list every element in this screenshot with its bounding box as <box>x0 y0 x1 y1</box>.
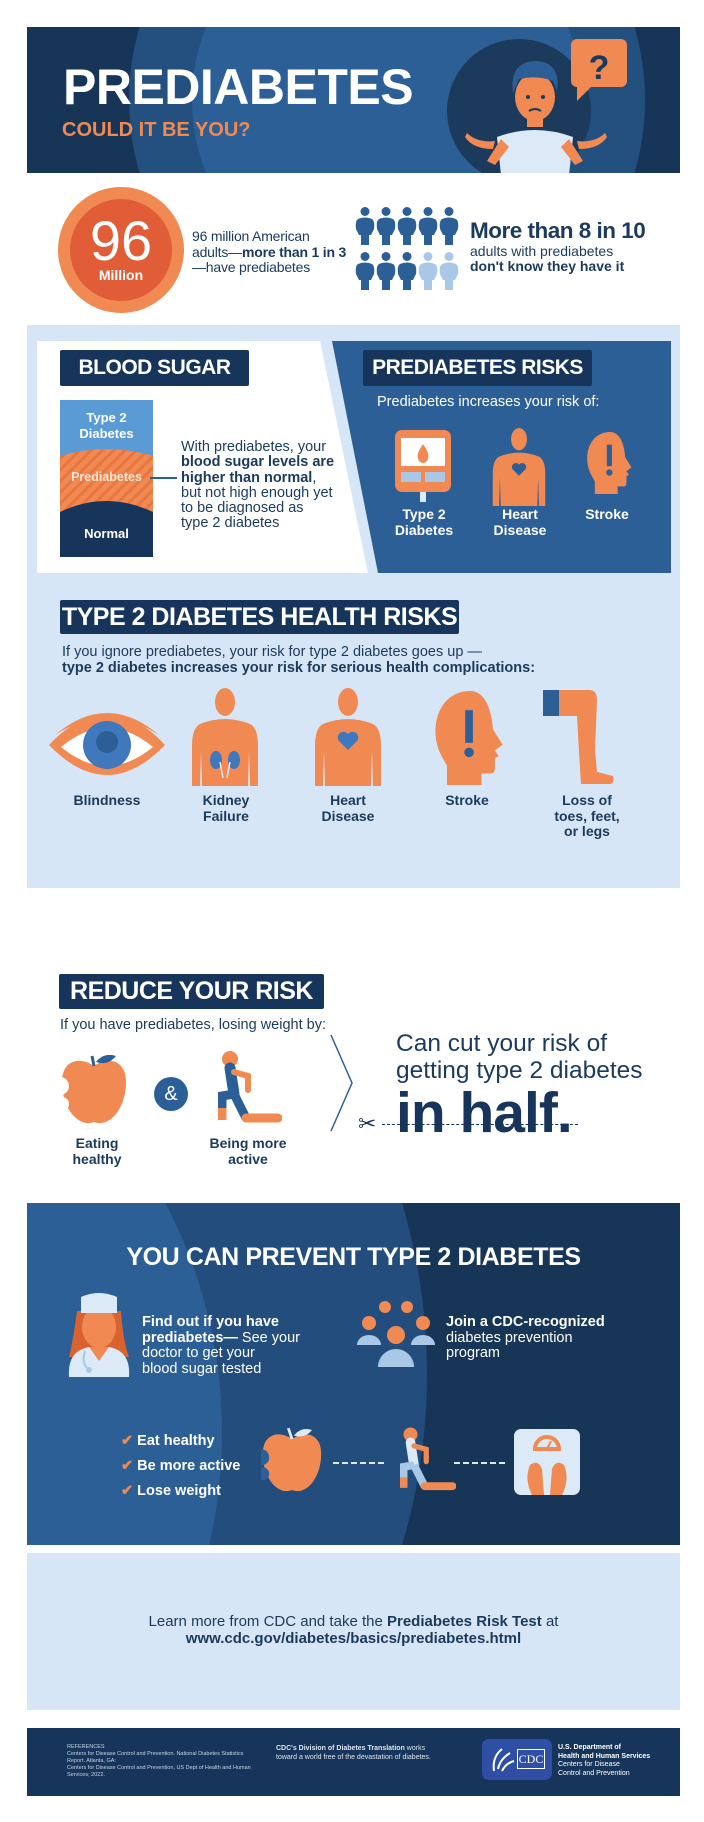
text: references: Centers for Disease Control and Prevention, US Dept of Health and Human Services; 2022. <box>67 1765 251 1778</box>
icon: apple <box>261 1428 322 1492</box>
text: blood sugar explanation: higher than normal, <box>181 470 316 486</box>
text: health risks intro: type 2 diabetes increases your risk for serious health complications: <box>62 660 535 676</box>
icon: eye <box>49 713 165 775</box>
label: stroke: Stroke <box>445 792 489 808</box>
stat text: 96 million: 96 million American <box>192 228 310 244</box>
stat text: 8 in 10: More than 8 in 10 <box>470 218 645 243</box>
text: reduce intro: If you have prediabetes, losing weight by: <box>60 1017 326 1033</box>
text: blood sugar explanation: type 2 diabetes <box>181 515 279 531</box>
icon: stroke head <box>587 432 632 494</box>
label: heart disease: Heart <box>502 506 538 522</box>
icon: doctor <box>68 1293 130 1377</box>
stat text: 8 in 10: adults with prediabetes <box>470 243 613 259</box>
heading: prediabetes risks: PREDIABETES RISKS <box>372 356 583 379</box>
text: can cut your risk <box>396 1030 643 1084</box>
label: blindness: Blindness <box>74 792 140 808</box>
text: references: REFERENCES <box>67 1744 105 1750</box>
logo: cdc: CDC <box>519 1752 543 1766</box>
title: PREDIABETES <box>63 59 413 115</box>
text: hhs: U.S. Department of <box>558 1744 621 1751</box>
chart: blood sugar bar: Prediabetes <box>71 470 142 484</box>
text: find out: blood sugar tested <box>142 1360 261 1376</box>
label: heart disease <box>322 792 374 824</box>
callout: in half: ✂ <box>358 1111 376 1136</box>
chart: blood sugar bar <box>60 400 153 557</box>
label: eating healthy <box>72 1135 122 1167</box>
text: join program: Join a CDC-recognized <box>446 1314 605 1330</box>
label: eating healthy: Eating <box>76 1135 118 1151</box>
label: eating healthy: healthy <box>72 1151 122 1167</box>
connector line <box>150 477 177 479</box>
text: division: toward a world free of the devastation of diabetes. <box>276 1754 431 1761</box>
chart: blood sugar bar: Normal <box>84 526 129 541</box>
panel: learn more: www.cdc.gov/diabetes/basics/prediabetes.html <box>186 1630 521 1647</box>
heading: you can prevent: YOU CAN PREVENT TYPE 2 DIABETES <box>126 1243 581 1271</box>
text: blood sugar explanation <box>181 439 334 531</box>
label: being more active: active <box>228 1151 268 1167</box>
icon: kidney torso <box>192 688 258 786</box>
text: find out: Find out if you have <box>142 1314 279 1330</box>
label: heart disease: Heart <box>330 792 366 808</box>
panel: you can prevent <box>27 1203 680 1545</box>
text: find out: doctor to get your <box>142 1345 255 1361</box>
text: blood sugar explanation: to be diagnosed as <box>181 500 304 516</box>
stat: 96 million circle <box>58 187 184 313</box>
icon: leg <box>543 690 614 784</box>
connector dashes <box>333 1462 384 1464</box>
chart: blood sugar bar: Type 2 <box>86 410 127 425</box>
text: references: Centers for Disease Control and Prevention. National Diabetes Statistics Report. Atlanta, GA: <box>67 1751 243 1764</box>
label: loss of toes: toes, feet, <box>554 808 620 824</box>
text: hhs: Health and Human Services <box>558 1752 650 1760</box>
text: join program: program <box>446 1345 500 1361</box>
label: type 2 diabetes: Type 2 <box>402 506 446 522</box>
text: can cut your risk: Can cut your risk of <box>396 1030 607 1057</box>
label: type 2 diabetes: Diabetes <box>395 522 453 538</box>
icon: scale <box>514 1429 580 1495</box>
label: loss of toes <box>554 792 620 839</box>
heading: reduce your risk: REDUCE YOUR RISK <box>70 977 313 1005</box>
label: type 2 diabetes <box>395 506 453 538</box>
text: join program: diabetes prevention <box>446 1330 573 1346</box>
text: blood sugar explanation: blood sugar levels are <box>181 454 334 470</box>
callout: in half: in half. <box>396 1081 572 1145</box>
stat text: 8 in 10 <box>470 218 645 274</box>
heading: blood sugar: BLOOD SUGAR <box>78 356 230 379</box>
text: references <box>67 1744 251 1778</box>
connector dashes <box>454 1462 505 1464</box>
chart: blood sugar bar: Diabetes <box>79 426 134 441</box>
stat text: 96 million: adults—more than 1 in 3 <box>192 244 346 260</box>
icon: people 8 in 10 <box>356 207 458 290</box>
icon: ampersand: & <box>164 1083 178 1105</box>
text: find out <box>142 1314 300 1376</box>
subtitle: COULD IT BE YOU? <box>62 119 251 141</box>
icon: glucose meter <box>395 430 451 502</box>
label: kidney failure: Kidney <box>203 792 249 808</box>
heading: blood sugar <box>60 350 249 386</box>
icon: confused person: ? <box>589 49 609 87</box>
text: hhs <box>558 1744 650 1778</box>
panel: learn more <box>27 1553 680 1710</box>
panel: blood sugar (white) <box>37 341 671 573</box>
icon: runner <box>218 1051 282 1122</box>
icon: torso heart <box>492 428 546 506</box>
stat: 96 million circle: Million <box>99 267 143 283</box>
text: hhs: Control and Prevention <box>558 1770 630 1776</box>
list: checks: ✔ Eat healthy <box>121 1433 215 1449</box>
label: heart disease: Disease <box>494 522 546 538</box>
icon: apple <box>62 1054 126 1124</box>
label: being more active: Being more <box>209 1135 286 1151</box>
icon: group <box>357 1301 435 1367</box>
label: heart disease: Disease <box>322 808 374 824</box>
footer <box>27 1728 680 1796</box>
text: health risks intro <box>62 644 535 676</box>
text: can cut your risk: getting type 2 diabetes <box>396 1057 643 1084</box>
text: division <box>276 1744 431 1762</box>
list: checks <box>121 1433 240 1499</box>
icon: confused person <box>465 39 627 173</box>
logo: cdc <box>482 1739 552 1780</box>
header banner <box>27 27 680 173</box>
text: health risks intro: If you ignore prediabetes, your risk for type 2 diabetes goes up — <box>62 644 482 660</box>
text: risk intro: Prediabetes increases your risk of: <box>377 394 599 410</box>
stat text: 96 million <box>192 228 346 275</box>
panel: risks (light blue) <box>27 325 680 888</box>
label: heart disease <box>494 506 546 538</box>
heading: type 2 health risks: TYPE 2 DIABETES HEALTH RISKS <box>62 602 457 630</box>
text: hhs: Centers for Disease <box>558 1761 620 1768</box>
stat text: 96 million: —have prediabetes <box>192 259 310 275</box>
text: division: CDC's Division of Diabetes Translation works <box>276 1745 425 1752</box>
list: checks: ✔ Be more active <box>121 1458 240 1474</box>
arrow: chevron <box>330 1034 353 1132</box>
icon: stroke head <box>435 691 502 785</box>
icon: ampersand <box>154 1077 188 1111</box>
stat text: 8 in 10: don't know they have it <box>470 258 624 274</box>
text: join program <box>446 1314 605 1361</box>
heading: prediabetes risks <box>363 350 592 386</box>
label: kidney failure: Failure <box>203 808 249 824</box>
text: blood sugar explanation: With prediabetes, your <box>181 439 326 455</box>
stat: 96 million circle: 96 <box>90 209 152 272</box>
icon: runner <box>400 1428 456 1490</box>
label: kidney failure <box>203 792 250 824</box>
icon: heart torso <box>315 688 381 786</box>
panel: learn more: Learn more from CDC and take the Prediabetes Risk Test at <box>149 1613 558 1630</box>
label: loss of toes: Loss of <box>562 792 612 808</box>
label: stroke: Stroke <box>585 506 629 522</box>
text: blood sugar explanation: but not high enough yet <box>181 485 333 501</box>
label: being more active <box>209 1135 286 1167</box>
label: loss of toes: or legs <box>564 823 610 839</box>
text: find out: prediabetes— See your <box>142 1330 300 1346</box>
list: checks: ✔ Lose weight <box>121 1483 221 1499</box>
